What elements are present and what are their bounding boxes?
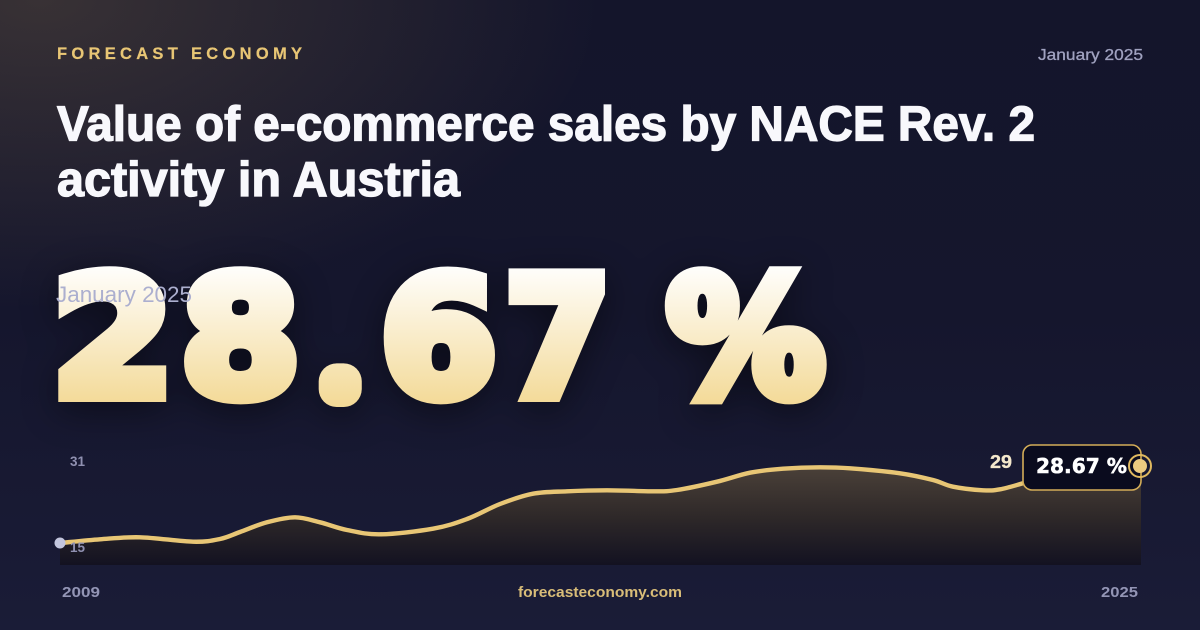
value callout: 28.67 % [1036,454,1127,478]
overlapping date label: January 2025 [56,282,192,307]
big value: % [666,243,825,435]
value callout [1023,445,1141,490]
y-axis max label: 31 [70,453,85,469]
latest rounded label: 29 [990,452,1012,472]
big value: 8 [181,242,300,434]
title: Value of e-commerce sales by NACE Rev. 2 [57,98,1035,152]
big value: . [333,353,348,399]
end year: 2025 [1101,584,1138,601]
big value: 6 [380,244,497,435]
site url: forecasteconomy.com [518,584,682,601]
chart area fill [60,466,1141,565]
end point marker [1129,455,1151,477]
big value: 2 [52,243,174,435]
big value: 7 [505,244,611,434]
start year: 2009 [62,584,100,601]
title: activity in Austria [57,153,461,207]
big value [52,242,825,435]
area chart [54,445,1151,565]
brand label: FORECAST ECONOMY [57,45,302,63]
date top right: January 2025 [1038,47,1143,64]
title [57,98,1035,207]
chart line [60,466,1140,543]
start point marker [54,538,66,548]
y-axis min label: 15 [70,539,85,555]
